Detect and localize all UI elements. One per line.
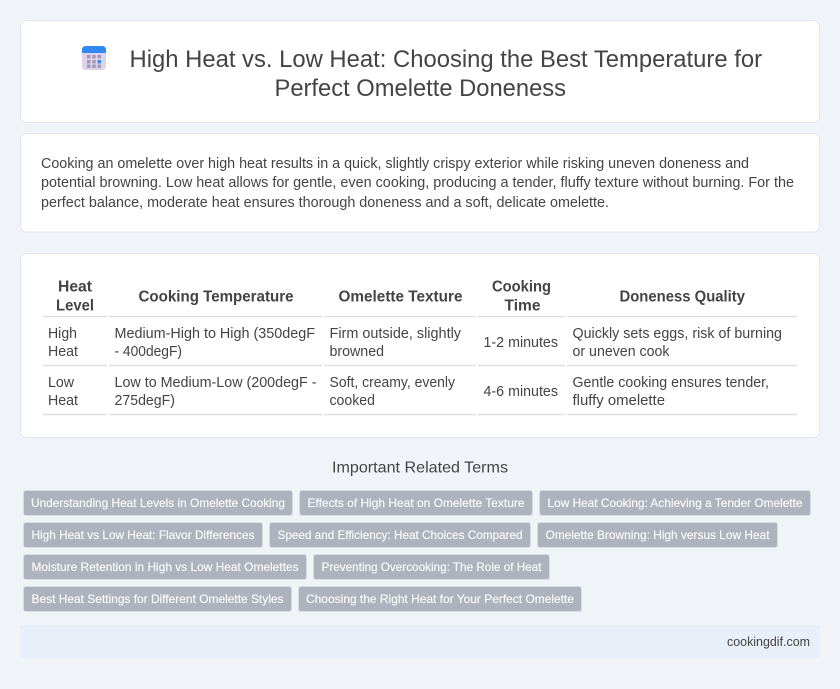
table row: high heat: Firm outside, slightly <box>330 326 462 342</box>
title: High Heat vs. Low Heat: Choosing the Best Temperature for <box>130 46 762 73</box>
tag: Moisture Retention in High vs Low Heat Omelettes <box>32 560 298 574</box>
footer <box>20 625 820 658</box>
table row: low heat: Low <box>48 375 75 391</box>
table header row: Heat <box>58 278 93 296</box>
table row: low heat: fluffy omelette <box>572 393 665 409</box>
table row: high heat: High <box>48 326 77 342</box>
table row: low heat: Heat <box>48 393 78 409</box>
tag <box>540 490 810 516</box>
panel: introduction <box>20 134 820 232</box>
table header row: Level <box>56 298 94 314</box>
tag <box>24 586 292 612</box>
table header row: Cooking <box>492 278 551 296</box>
tag: Preventing Overcooking: The Role of Heat <box>322 560 542 574</box>
table row: high heat: Medium-High to High (350degF <box>114 326 315 342</box>
title <box>130 46 762 102</box>
tag <box>300 490 532 516</box>
table row: low heat: Gentle cooking ensures tender, <box>572 375 769 391</box>
tag <box>24 490 292 516</box>
footer: cookingdif.com <box>727 635 810 649</box>
tag <box>270 522 530 548</box>
table row: high heat <box>48 326 782 360</box>
text block: introduction paragraph <box>41 156 794 211</box>
tag: Best Heat Settings for Different Omelette Styles <box>32 592 284 606</box>
table row: high heat: Quickly sets eggs, risk of burning <box>572 326 782 342</box>
tag: High Heat vs Low Heat: Flavor Differences <box>32 528 254 542</box>
tag: Omelette Browning: High versus Low Heat <box>546 528 770 542</box>
table header row: Omelette Texture <box>338 288 463 306</box>
icon: calendar <box>82 46 106 70</box>
table header row <box>56 278 745 314</box>
table row: high heat: - 400degF) <box>114 344 182 360</box>
table row: low heat: cooked <box>330 393 375 409</box>
tag <box>314 554 550 580</box>
heading: important related terms: Important Related Terms <box>332 460 508 476</box>
table row: low heat <box>48 375 769 409</box>
table row: high heat: or uneven cook <box>572 344 670 360</box>
table row: low heat: 4-6 minutes <box>484 384 558 400</box>
tag <box>24 554 306 580</box>
panel: related term tags <box>24 490 810 612</box>
table row: low heat: Low to Medium-Low (200degF - <box>114 375 317 391</box>
table row: high heat: Heat <box>48 344 78 360</box>
title: Perfect Omelette Doneness <box>274 75 566 102</box>
tag: Effects of High Heat on Omelette Texture <box>308 496 525 510</box>
text block: introduction paragraph: potential browning. Low heat allows for gentle, even cooking, producing a tender, fluffy texture without burning. For the <box>41 175 794 191</box>
table row: high heat: browned <box>330 344 384 360</box>
tag <box>538 522 778 548</box>
table row: high heat: 1-2 minutes <box>484 335 558 351</box>
text block: introduction paragraph: Cooking an omelette over high heat results in a quick, slightly crispy exterior while risking uneven doneness and <box>41 156 749 172</box>
tag <box>24 522 262 548</box>
table row: low heat: Soft, creamy, evenly <box>330 375 456 391</box>
panel: comparison table <box>20 254 820 438</box>
tag: Understanding Heat Levels in Omelette Cooking <box>31 496 285 510</box>
tag: Low Heat Cooking: Achieving a Tender Omelette <box>548 496 803 510</box>
table header row: Doneness Quality <box>620 288 745 306</box>
tag: Choosing the Right Heat for Your Perfect Omelette <box>306 592 574 606</box>
tag: Speed and Efficiency: Heat Choices Compared <box>278 528 522 542</box>
table header row: Cooking Temperature <box>138 288 294 306</box>
tag <box>298 586 582 612</box>
table header row: Time <box>504 298 541 314</box>
text block: introduction paragraph: perfect balance, moderate heat ensures thorough doneness and a soft, delicate omelette. <box>41 195 609 211</box>
panel: title header <box>20 20 820 122</box>
table row: low heat: 275degF) <box>114 393 175 409</box>
